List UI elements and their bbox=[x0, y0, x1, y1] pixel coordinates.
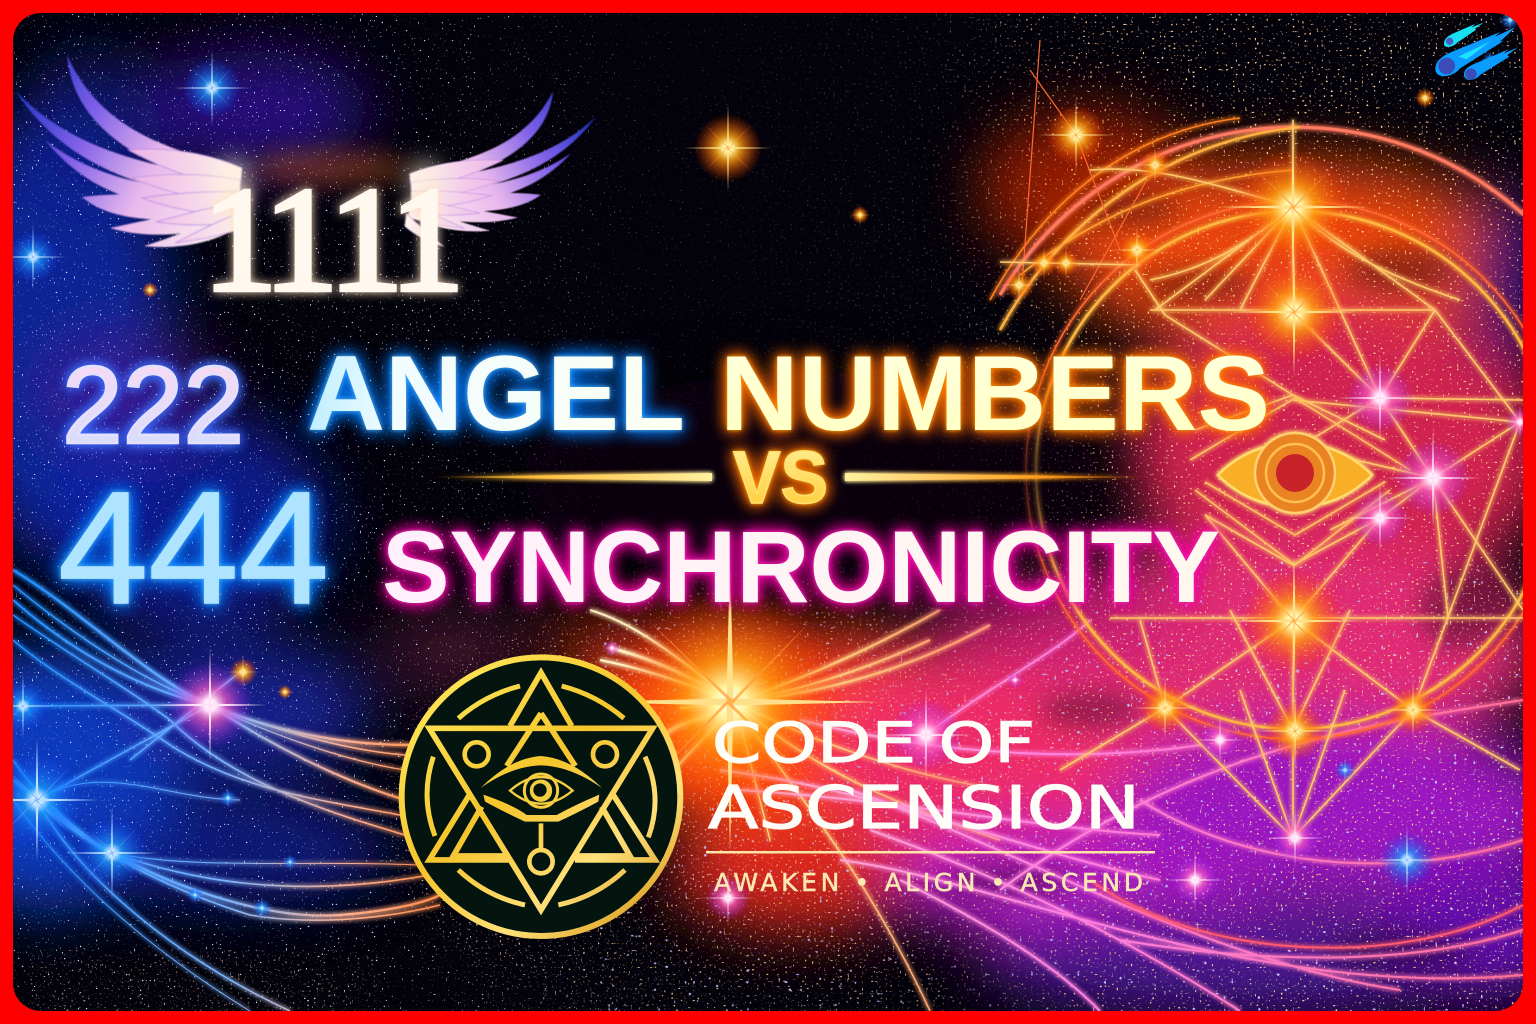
title: Angel Numbers bbox=[307, 333, 1270, 453]
energy streaks lower left bbox=[13, 570, 440, 1011]
number 1111 bbox=[206, 182, 465, 300]
number 1111: 1 bbox=[264, 157, 338, 323]
sacred geometry lines bbox=[1000, 120, 1523, 838]
logo eye lids bbox=[481, 756, 602, 822]
thin red lines upper left of geometry bbox=[1022, 40, 1155, 300]
energy streaks centre bbox=[590, 610, 1000, 1011]
number 1111: 1 bbox=[202, 157, 278, 323]
number 1111: 1 bbox=[328, 157, 404, 323]
dark mottled patches on nebula bbox=[950, 195, 1500, 968]
divider line right bbox=[845, 473, 1160, 481]
title: Synchronicity: SYNCHRONICITY bbox=[382, 510, 1220, 624]
warm glow above 1111 bbox=[250, 150, 410, 186]
glowing orange and pink stars bbox=[140, 85, 1536, 927]
brand tagline: AWAKEN • ALIGN • ASCEND bbox=[714, 868, 1143, 897]
left wing root glow bbox=[216, 160, 248, 204]
number 444: 444 bbox=[58, 458, 329, 637]
right angel wing bbox=[405, 91, 596, 247]
brand line: code of: CODE OF bbox=[712, 711, 1035, 775]
logo disc bbox=[402, 657, 680, 936]
number 1111: 1 bbox=[390, 157, 464, 323]
comet small bbox=[1444, 22, 1484, 47]
logo text bbox=[706, 711, 1155, 897]
title word: Angel: ANGEL bbox=[307, 333, 685, 453]
eye of providence bbox=[1190, 398, 1410, 565]
comet lower bbox=[1464, 47, 1518, 80]
logo small circles bbox=[465, 742, 617, 873]
logo emblem bbox=[402, 657, 680, 936]
brand rule bbox=[706, 851, 1155, 854]
logo eye bbox=[510, 774, 573, 807]
dark halo behind title bbox=[520, 373, 1100, 583]
number 222: 222 bbox=[62, 344, 244, 467]
comet large bbox=[1435, 27, 1515, 76]
sacred geometry outer circles bbox=[990, 118, 1536, 948]
logo ring arcs bbox=[427, 686, 655, 905]
left angel wing bbox=[15, 55, 244, 247]
right wing root glow bbox=[411, 162, 439, 202]
divider line left bbox=[425, 473, 712, 481]
title: vs: VS bbox=[733, 436, 828, 519]
logo star of triangles bbox=[429, 673, 655, 910]
brand line: ascension: ASCENSION bbox=[708, 773, 1140, 842]
energy streaks lower right bbox=[720, 620, 1523, 1011]
comet icon bbox=[1435, 22, 1518, 80]
title word: Numbers: NUMBERS bbox=[720, 333, 1270, 453]
